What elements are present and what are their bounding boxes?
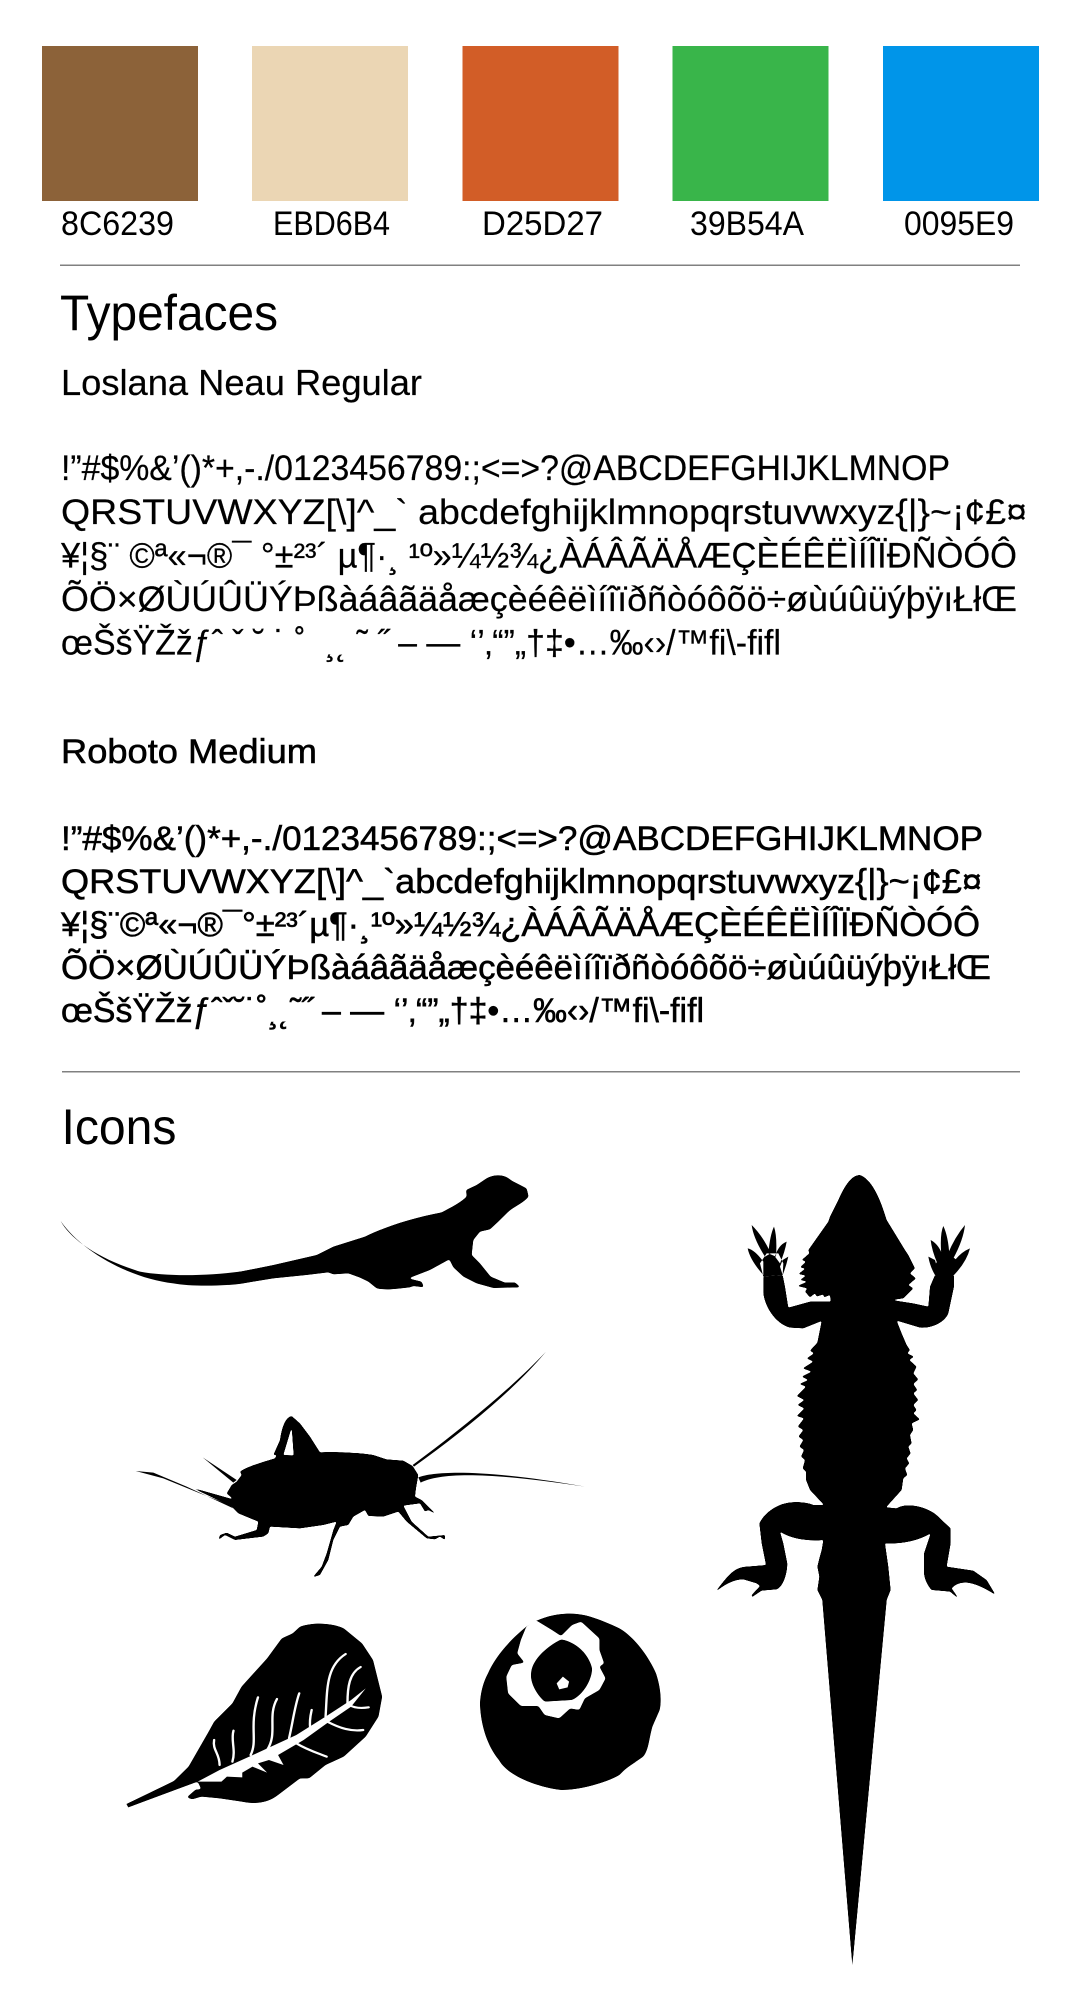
berry centre [557, 1677, 569, 1689]
right front hand [928, 1225, 970, 1275]
lizard body [227, 1175, 529, 1289]
glyph set: Loslana Neau: ÕÖ×ØÙÚÛÜÝÞßàáâãäåæçèéêëìíîïðñòóôõö÷øùúûüýþÿıŁłŒ [61, 579, 1017, 619]
swatch: 39B54A [672, 46, 828, 201]
lizard tail tip [822, 1600, 887, 1965]
glyph set: Roboto Medium: ¥¦§¨©ª«¬®¯°±²³´µ¶·¸¹º»¼½¾¿ÀÁÂÃÄÅÆÇÈÉÊËÌÍÎÏÐÑÒÓÔ [60, 906, 980, 944]
leaf midrib [198, 1688, 366, 1782]
leaf veins [214, 1654, 369, 1765]
icon: lizard top view [714, 1175, 996, 1965]
icon: cricket [136, 1352, 585, 1577]
berry body [480, 1614, 661, 1790]
glyph set: Roboto Medium: !”#$%&’()*+,-./0123456789:;<=>?@ABCDEFGHIJKLMNOP [61, 820, 983, 858]
swatch label: 0095E9: 0095E9 [904, 205, 1014, 243]
icon: blueberry [480, 1614, 661, 1790]
icon: lizard side view [61, 1175, 529, 1289]
glyph set: Loslana Neau: œŠšŸŽžƒˆ ˇ ˘ ˙ ˚ ¸˛ ˜ ˝ – — ‘’‚“”„†‡•…‰‹›/™ﬁ\-ﬁﬂ [61, 624, 781, 662]
swatch label: D25D27: D25D27 [482, 205, 603, 243]
swatch: D25D27 [462, 46, 618, 201]
glyph set: Roboto Medium: œŠšŸŽžƒˆˇ˘˙˚¸˛˜˝ – — ‘’‚“”„†‡•…‰‹›/™ﬁ\-ﬁﬂ [61, 992, 704, 1030]
typeface name: Loslana Neau Regular: Loslana Neau Regular [61, 362, 422, 403]
heading: Typefaces: Typefaces [60, 285, 278, 341]
glyph set: Loslana Neau: ¥¦§¨ ©ª«¬®¯ °±²³´ µ¶·¸ ¹º»¼½¾¿ÀÁÂÃÄÅÆÇÈÉÊËÌÍÎÏÐÑÒÓÔ [60, 536, 1017, 576]
leaf stem [126, 1779, 185, 1807]
cricket body [182, 1416, 445, 1577]
swatch label: EBD6B4: EBD6B4 [273, 205, 390, 243]
panel: colour palette [42, 46, 1039, 243]
heading: Icons: Icons [62, 1099, 176, 1155]
lizard tail [61, 1221, 243, 1286]
glyph set: Loslana Neau [60, 449, 1027, 662]
icon: leaf [126, 1624, 382, 1807]
swatch label: 8C6239: 8C6239 [61, 205, 174, 243]
panel: Roboto Medium specimen [60, 733, 991, 1030]
swatch: 8C6239 [42, 46, 198, 201]
swatch: 0095E9 [883, 46, 1039, 201]
glyph set: Roboto Medium: QRSTUVWXYZ[\]^_`abcdefghijklmnopqrstuvwxyz{|}~¡¢£¤ [61, 863, 982, 901]
cricket antennae [413, 1352, 585, 1487]
cricket cerci [136, 1457, 237, 1508]
glyph set: Roboto Medium [60, 820, 991, 1030]
panel: Loslana Neau specimen [60, 362, 1027, 662]
left front hand [748, 1225, 788, 1277]
swatch label: 39B54A: 39B54A [690, 205, 804, 243]
lizard body [714, 1175, 996, 1965]
berry calyx [506, 1620, 606, 1718]
typeface name: Roboto Medium: Roboto Medium [61, 733, 317, 771]
glyph set: Loslana Neau: !”#$%&’()*+,-./0123456789:;<=>?@ABCDEFGHIJKLMNOP [61, 449, 950, 488]
glyph set: Loslana Neau: QRSTUVWXYZ[\]^_` abcdefghijklmnopqrstuvwxyz{|}~¡¢£¤ [61, 493, 1027, 532]
glyph set: Roboto Medium: ÕÖ×ØÙÚÛÜÝÞßàáâãäåæçèéêëìíîïðñòóôõö÷øùúûüýþÿıŁłŒ [61, 949, 991, 987]
swatch: EBD6B4 [252, 46, 408, 201]
leaf blade [126, 1624, 382, 1807]
